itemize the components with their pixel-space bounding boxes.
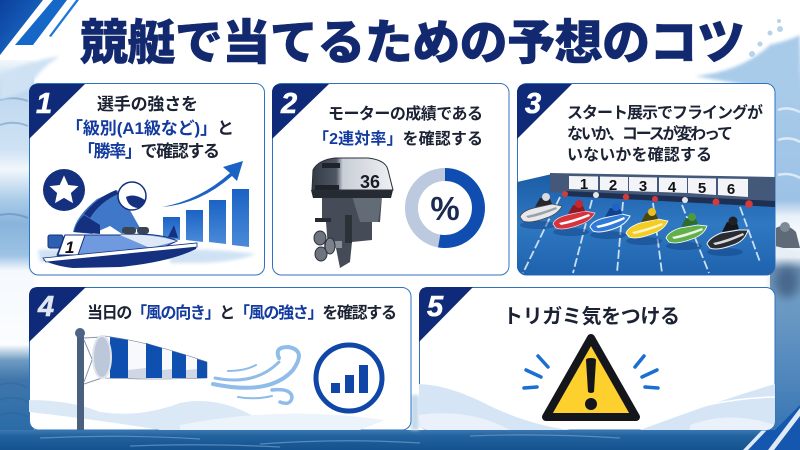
pale wave decoration — [419, 384, 775, 430]
panel 1 text: 「勝率」で確認する — [78, 142, 220, 161]
panel 2 text: モーターの成績である — [328, 104, 483, 123]
icon: racer on boat — [43, 182, 197, 268]
panel 1: racer strength — [29, 84, 264, 275]
boat 3 blue — [590, 203, 630, 239]
pale wave decoration — [29, 400, 385, 430]
panel 4 text: 当日の「風の向き」と「風の強さ」を確認する — [87, 303, 397, 322]
boat 5 green — [666, 213, 707, 250]
panel 1 text — [66, 94, 234, 161]
panel 2 text — [313, 104, 483, 148]
buoys — [562, 191, 753, 208]
icon: warning triangle — [546, 338, 636, 417]
icon: outboard motor — [311, 158, 393, 268]
donut chart: percentage — [412, 174, 478, 242]
start scoreboard: 1 — [580, 176, 588, 193]
panel 4: wind — [29, 287, 411, 430]
number badge 1 — [29, 84, 85, 139]
panel 5 text: トリガミ気をつける — [503, 305, 680, 328]
water and lanes — [517, 174, 775, 275]
panel 3 text — [567, 103, 763, 164]
icon: windsock — [75, 328, 207, 430]
start scoreboard — [550, 173, 775, 207]
panel 3 text: ないか、コースが変わって — [567, 124, 733, 143]
panel 3 text: いないかを確認する — [567, 145, 712, 164]
panel 2: motor — [272, 84, 509, 275]
panel 3 text: スタート展示でフライングが — [567, 103, 763, 122]
small racer in background spray — [775, 222, 800, 258]
icon: alert ticks — [524, 356, 658, 388]
panel 1 text: 「級別(A1級など)」と — [66, 119, 234, 138]
donut chart: percentage: % — [430, 190, 460, 227]
number badge 4 — [29, 287, 86, 342]
start scoreboard: 2 — [609, 177, 617, 194]
number badge 5: 5 — [427, 291, 444, 323]
top-left corner stripes — [0, 0, 79, 55]
start scoreboard: 4 — [668, 179, 677, 196]
boat 1 white — [520, 193, 562, 229]
boat 2 red — [553, 200, 595, 236]
number badge 3: 3 — [525, 88, 541, 120]
icon: wind strength signal — [316, 345, 382, 411]
number badge 4: 4 — [37, 291, 54, 323]
panel 2 text: 「2連対率」を確認する — [313, 129, 483, 148]
bottom-right corner stripes — [743, 405, 800, 450]
number badge 2 — [272, 84, 329, 139]
number badge 3 — [517, 84, 572, 139]
boat 4 yellow — [626, 208, 668, 245]
icon: star badge — [43, 169, 85, 211]
water splash — [38, 249, 256, 263]
panel 3: start exhibition — [517, 84, 775, 275]
start scoreboard: 6 — [727, 181, 735, 198]
panel 5: torigami warning — [419, 287, 775, 430]
title: 競艇で当てるための予想のコツ — [80, 17, 745, 70]
number badge 1: 1 — [36, 88, 52, 120]
start scoreboard: 3 — [639, 178, 647, 195]
icon: outboard motor: 36 — [360, 172, 380, 192]
icon: racer on boat: 1 — [65, 238, 74, 257]
boat 6 black — [707, 216, 748, 256]
panel 1 text: 選手の強さを — [97, 94, 198, 114]
icon: wind gusts — [213, 347, 299, 403]
bar chart with rising arrow — [162, 161, 249, 247]
start scoreboard: 5 — [698, 180, 706, 197]
number badge 5 — [419, 287, 473, 342]
number badge 2: 2 — [280, 88, 297, 120]
